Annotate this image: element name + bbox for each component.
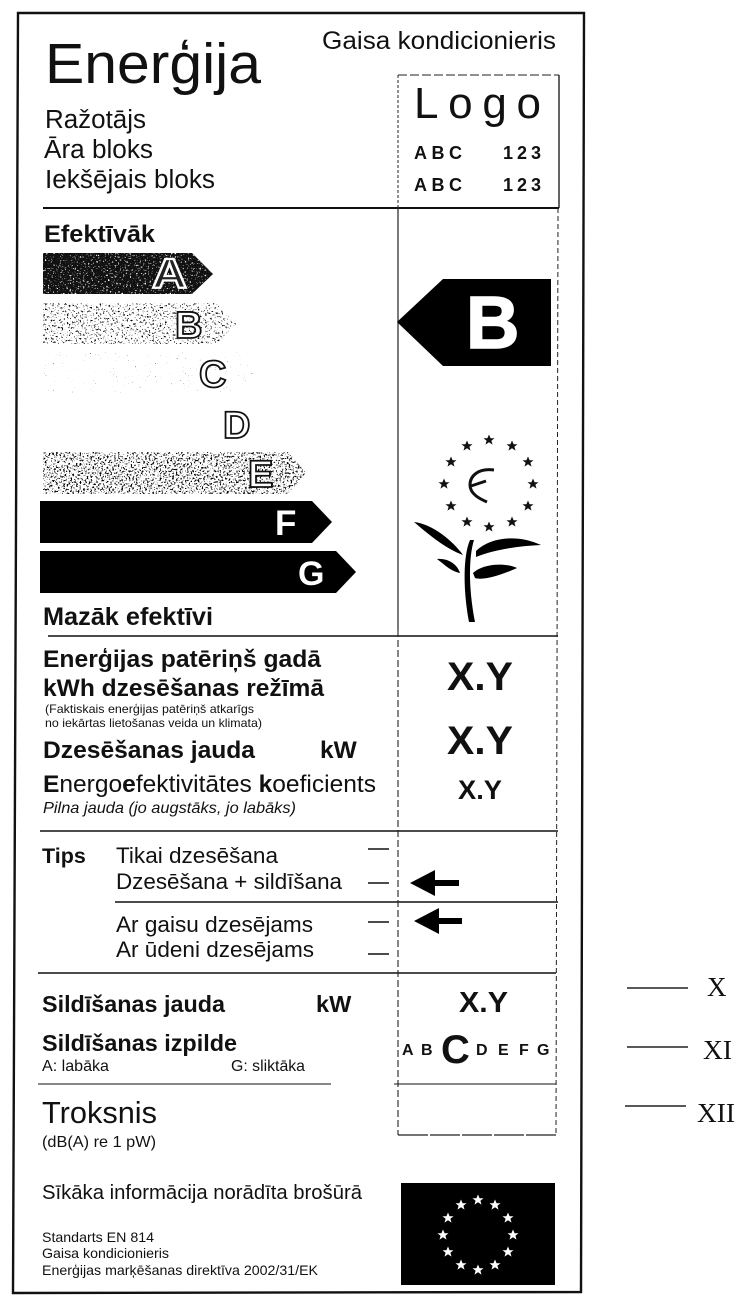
noise: (dB(A) re 1 pW) [42, 1134, 156, 1151]
logo block: ABC [414, 175, 462, 195]
arrow C [44, 352, 254, 392]
standards: Standarts EN 814 [42, 1229, 154, 1245]
EU flag [401, 1183, 555, 1285]
arrow B: B [175, 305, 202, 347]
arrow D: D [223, 405, 250, 447]
values X.Y: X.Y [447, 719, 513, 763]
energy consumption text: (Faktiskais enerģijas patēriņš atkarīgs [45, 702, 254, 716]
values X.Y: X.Y [447, 655, 513, 699]
heating performance: Sildīšanas izpilde [42, 1030, 237, 1056]
heating power: Sildīšanas jauda [42, 991, 226, 1017]
arrow C: C [199, 354, 226, 396]
energy consumption text: no iekārtas lietošanas veida un klimata) [45, 716, 262, 730]
heating scale A to G: G [537, 1042, 549, 1059]
noise: Troksnis [42, 1095, 157, 1130]
efficiency coefficient: Pilna jauda (jo augstāks, jo labāks) [43, 800, 296, 817]
energy consumption text [43, 646, 325, 730]
logo block: 123 [503, 175, 541, 195]
value column box [398, 75, 559, 1135]
type section: Ar ūdeni dzesējams [116, 937, 314, 962]
values X.Y [447, 655, 513, 805]
heating performance: A: labāka [42, 1058, 109, 1075]
energy scale [40, 250, 356, 593]
arrow G [40, 551, 356, 593]
arrow E [43, 452, 306, 496]
heating scale A to G: B [421, 1042, 433, 1059]
marker X: X [707, 972, 727, 1002]
appliance type: Gaisa kondicionieris [322, 27, 556, 55]
manufacturer fields: Ražotājs [45, 106, 146, 134]
standards: Gaisa kondicionieris [42, 1245, 169, 1261]
arrow A: A [152, 250, 187, 297]
label frame [13, 13, 584, 1293]
heating scale A to G: E [498, 1042, 509, 1059]
heating scale A to G: F [519, 1042, 529, 1059]
type section: Dzesēšana + sildīšana [116, 869, 343, 894]
logo block: 123 [503, 143, 541, 163]
arrow A [43, 253, 213, 294]
noise [42, 1095, 157, 1151]
arrow G: G [298, 555, 324, 593]
arrow B [43, 303, 236, 347]
marker X [627, 972, 727, 1002]
logo block: ABC [414, 143, 462, 163]
marker XI [627, 1035, 732, 1065]
cooling power [43, 737, 358, 764]
heating scale A to G: D [476, 1042, 488, 1059]
marker XII [625, 1098, 735, 1128]
cooling power: Dzesēšanas jauda [43, 737, 255, 764]
type section: Tikai dzesēšana [116, 843, 279, 868]
title: Enerģija [45, 32, 262, 95]
logo block: Logo [414, 79, 541, 128]
arrow: cooling and heating [410, 870, 459, 896]
manufacturer fields: Āra bloks [44, 136, 153, 164]
standards: Enerģijas marķēšanas direktīva 2002/31/EK [42, 1262, 319, 1278]
icon: EU ecolabel flower [414, 434, 541, 622]
marker XI: XI [703, 1035, 732, 1065]
heating performance [42, 1030, 305, 1075]
marker XII: XII [697, 1098, 735, 1128]
cooling power: kW [320, 737, 358, 764]
heating power: kW [316, 991, 352, 1017]
energy consumption text: Enerģijas patēriņš gadā [43, 646, 322, 673]
heating scale A to G [402, 1028, 549, 1072]
heating scale A to G: C [441, 1028, 470, 1072]
heating scale A to G: A [402, 1042, 414, 1059]
arrow E: E [248, 454, 273, 496]
heading: more efficient: Efektīvāk [44, 221, 155, 248]
rating arrow B [397, 279, 551, 366]
standards [42, 1229, 319, 1278]
type section [42, 843, 389, 962]
manufacturer fields [44, 106, 215, 194]
rating arrow B: B [466, 281, 519, 364]
energy consumption text: kWh dzesēšanas režīmā [43, 675, 325, 702]
divider lines [38, 208, 559, 1084]
more information note: Sīkāka informācija norādīta brošūrā [42, 1182, 363, 1204]
manufacturer fields: Iekšējais bloks [45, 166, 215, 194]
arrow: air cooled [414, 908, 462, 934]
arrow F: F [275, 504, 296, 543]
arrow F [40, 501, 332, 543]
type section: Tips [42, 844, 86, 868]
type section: Ar gaisu dzesējams [116, 912, 313, 937]
efficiency coefficient: Energoefektivitātes koeficients [43, 771, 376, 798]
logo block [414, 79, 541, 195]
efficiency coefficient [43, 771, 376, 817]
heading: less efficient: Mazāk efektīvi [43, 603, 213, 631]
values X.Y: X.Y [458, 775, 502, 805]
heating power [42, 987, 508, 1019]
heating performance: G: sliktāka [231, 1058, 305, 1075]
heating power: X.Y [459, 987, 508, 1019]
